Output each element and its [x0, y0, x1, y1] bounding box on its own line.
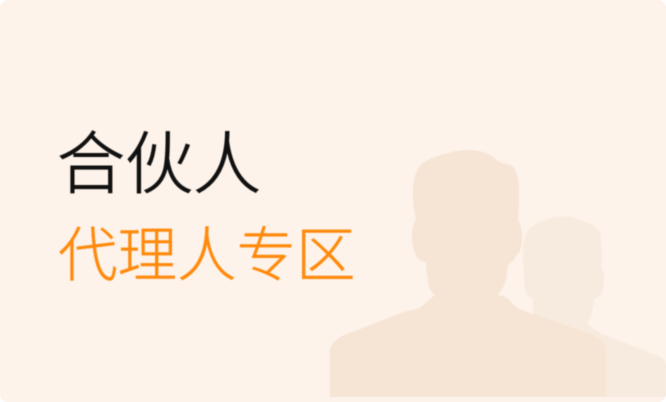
icon: front person silhouette — [330, 150, 606, 397]
subheading: 代理人专区: 代理人专区 — [58, 222, 356, 289]
heading: 合伙人: 合伙人 — [57, 127, 261, 203]
icon: rear person silhouette — [520, 217, 666, 397]
